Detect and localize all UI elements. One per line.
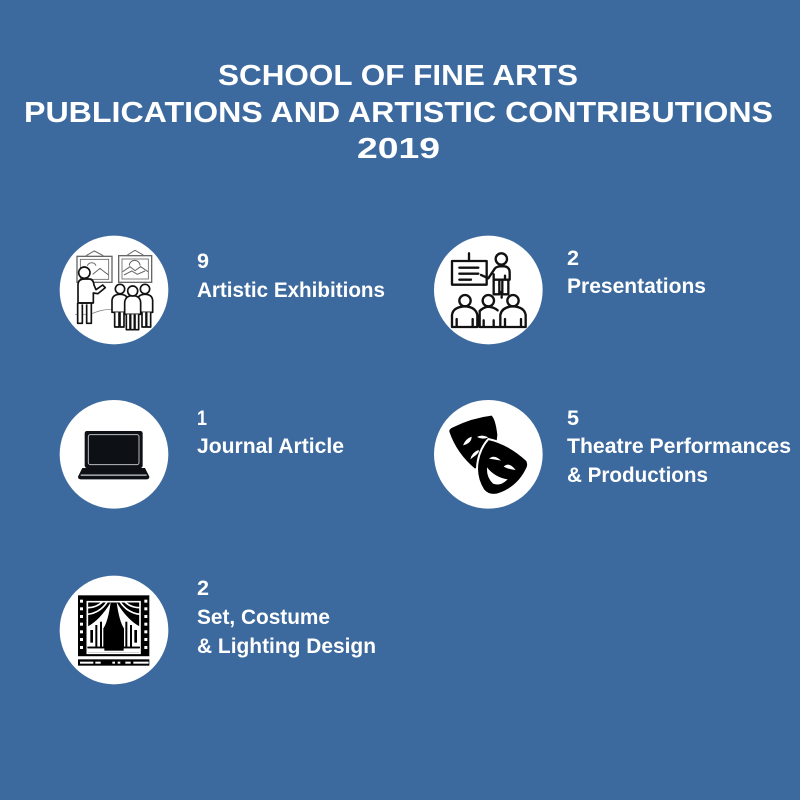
front mask — [477, 439, 528, 495]
text: presentations: 2 — [567, 247, 579, 270]
text: theatre performances: 5 — [567, 407, 579, 430]
visitor right — [137, 294, 153, 312]
text: artistic exhibitions — [197, 250, 385, 302]
text: set, costume and lighting design: Set, Costume — [197, 606, 330, 629]
title: 2019 — [357, 133, 440, 165]
text: set, costume and lighting design — [197, 577, 376, 658]
icon: stage with curtains — [60, 576, 168, 684]
text: presentations — [567, 247, 706, 298]
icon: laptop — [60, 400, 168, 509]
text: theatre performances: Theatre Performances — [567, 435, 791, 458]
presenter — [78, 279, 105, 303]
icon: gallery visitors at an exhibition — [60, 236, 168, 344]
text: journal article — [197, 407, 344, 458]
text: presentations: Presentations — [567, 275, 706, 298]
text: theatre performances: & Productions — [567, 464, 708, 487]
item: presentations — [434, 236, 706, 344]
text: artistic exhibitions: 9 — [197, 250, 209, 273]
item: journal article — [60, 400, 344, 509]
visitor left — [112, 294, 128, 312]
item: artistic exhibitions — [60, 236, 385, 344]
item: theatre performances — [434, 400, 791, 509]
text: theatre performances — [567, 407, 791, 487]
text: set, costume and lighting design: & Lighting Design — [197, 635, 376, 658]
text: artistic exhibitions: Artistic Exhibitions — [197, 279, 385, 302]
text: journal article: Journal Article — [197, 435, 344, 458]
item: set, costume and lighting design — [60, 576, 376, 684]
icon: presenter with audience — [434, 236, 543, 344]
icon: theatre masks — [434, 400, 543, 509]
back mask — [449, 416, 497, 469]
title: PUBLICATIONS AND ARTISTIC CONTRIBUTIONS — [24, 97, 773, 129]
visitor centre — [125, 296, 141, 314]
text: set, costume and lighting design: 2 — [197, 577, 209, 600]
text: journal article: 1 — [197, 407, 207, 430]
title — [24, 60, 773, 165]
title: SCHOOL OF FINE ARTS — [218, 60, 578, 92]
curtains — [87, 602, 111, 647]
